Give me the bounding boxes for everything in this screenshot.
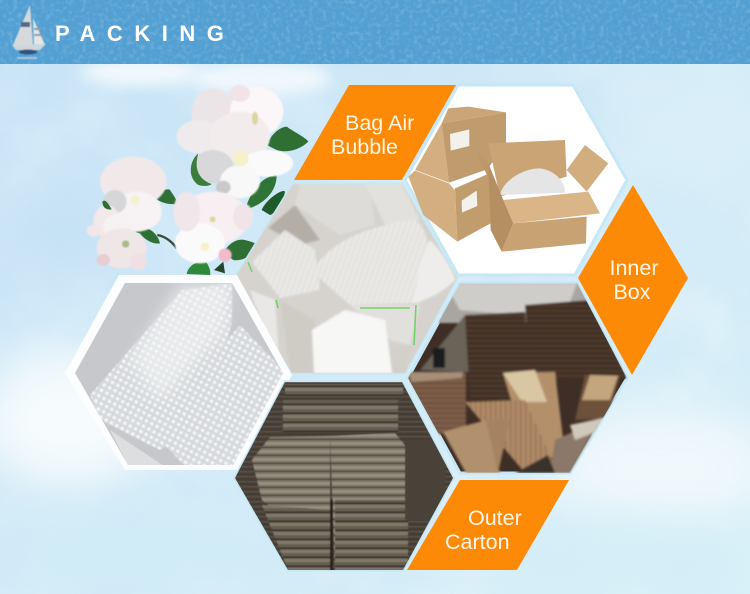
callout: Inner Box: Inner <box>609 256 659 280</box>
callout: Outer Carton <box>407 480 569 570</box>
callout: Inner Box: Box <box>613 280 651 304</box>
icon: closed top box <box>415 107 506 183</box>
icon: closed lower box <box>408 171 491 242</box>
blossom: upper <box>177 85 293 198</box>
leaf: crescent over blossom <box>191 153 212 186</box>
icon: sailboat logo <box>12 5 46 59</box>
header band <box>0 0 750 64</box>
flowers <box>87 85 308 275</box>
callout: Outer Carton: Outer <box>468 506 522 530</box>
panel: bubble wrap roll hexagon <box>65 275 292 470</box>
leaf: small on left blossom <box>102 201 112 209</box>
panel: flattened cartons stack hexagon <box>235 382 455 572</box>
panel: cardboard boxes hexagon <box>405 85 627 275</box>
callout: Inner Box <box>578 185 688 375</box>
panel: warehouse cartons hexagon <box>405 283 630 473</box>
blossom: left <box>87 157 167 270</box>
callout: Bag Air Bubble: Bag Air <box>345 111 414 135</box>
panel: bubble bags hexagon <box>235 184 460 374</box>
title: PACKING <box>55 21 235 46</box>
callout: Bag Air Bubble: Bubble <box>331 135 398 159</box>
callout: Bag Air Bubble <box>294 85 456 180</box>
leaves behind blossoms <box>130 127 308 275</box>
callout: Outer Carton: Carton <box>445 530 510 554</box>
icon: open box with bubble wrap <box>475 140 608 252</box>
blossom: lower <box>173 192 253 263</box>
